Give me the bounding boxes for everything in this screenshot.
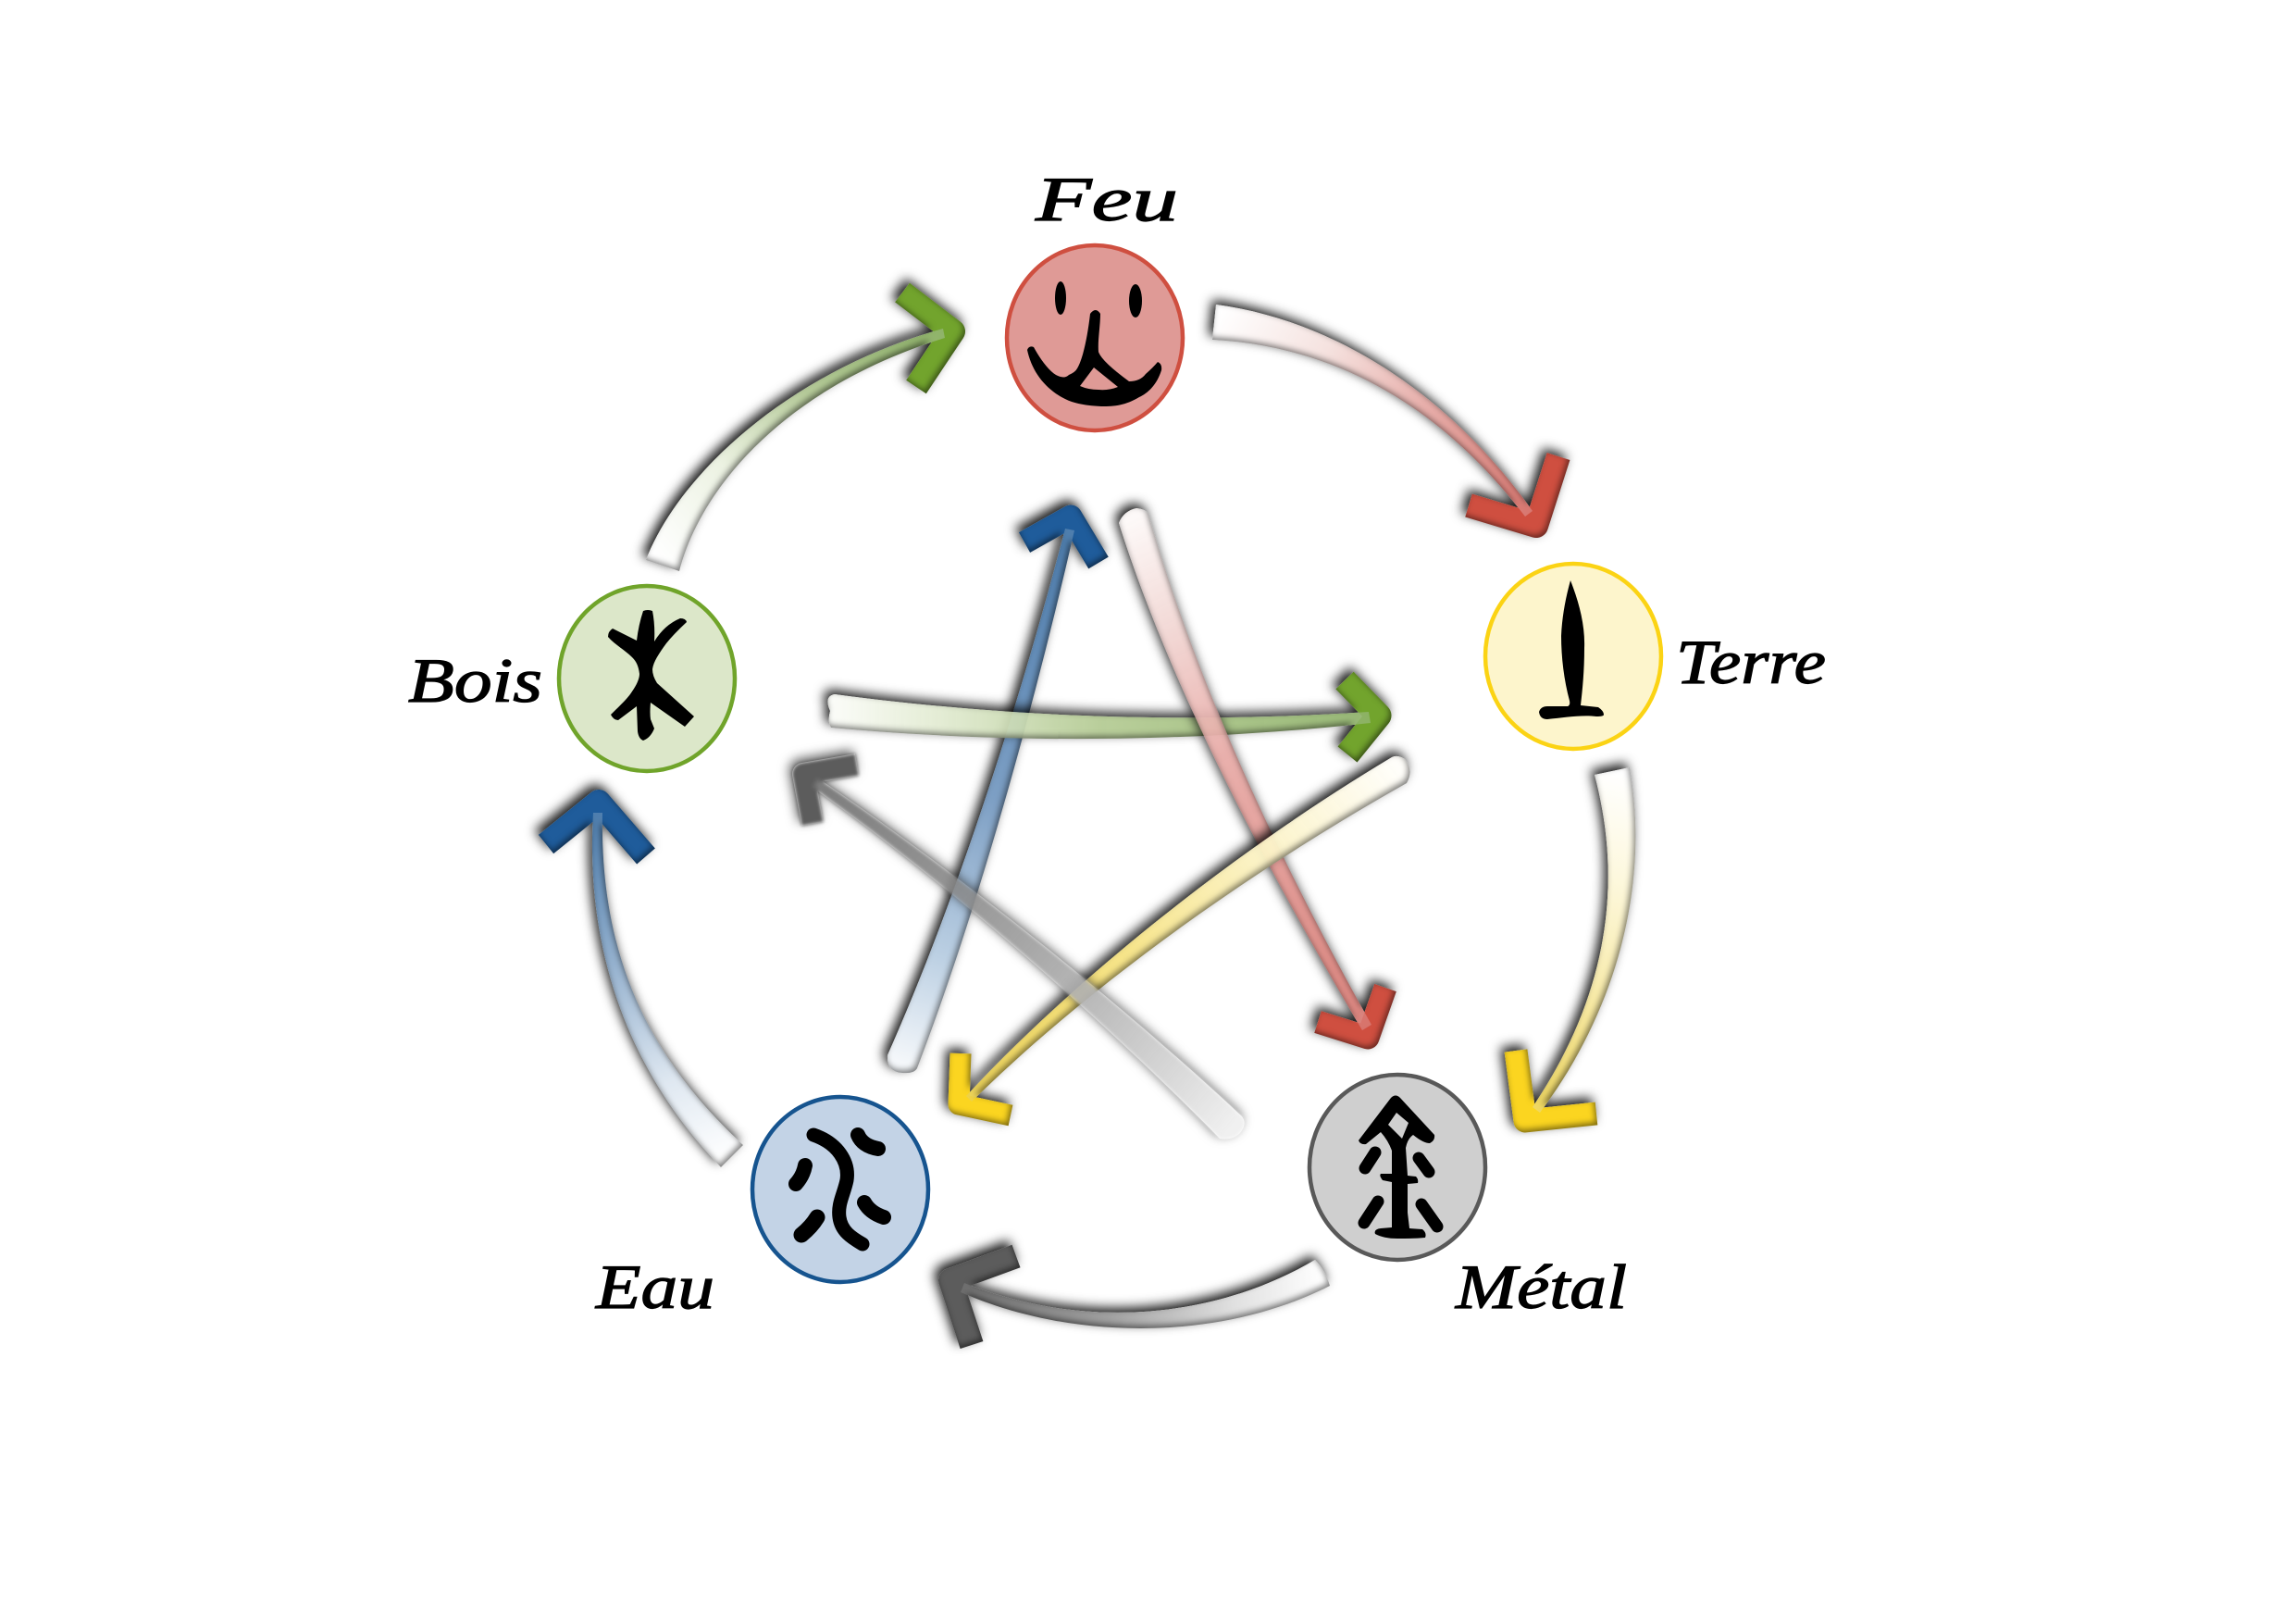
- node: Terre: [1485, 564, 1661, 749]
- arrow: Feu to Terre: [1212, 305, 1558, 526]
- node: Eau: [752, 1097, 928, 1282]
- label: Feu: Feu: [1035, 164, 1178, 234]
- icon: Terre glyph: [1539, 580, 1604, 719]
- arrow: Terre to Métal: [1516, 767, 1635, 1121]
- icon: Eau glyph: [796, 1135, 884, 1244]
- label: Métal: Métal: [1455, 1252, 1627, 1322]
- node: Bois: [559, 586, 735, 771]
- arrow: Terre to Eau: [959, 756, 1410, 1115]
- arrow: Eau to Feu: [887, 517, 1098, 1073]
- node: Feu: [1007, 245, 1183, 430]
- arrow: Eau to Bois: [546, 802, 743, 1167]
- label: Bois: Bois: [408, 645, 542, 716]
- icon: Métal glyph: [1359, 1096, 1437, 1239]
- arrow: Feu to Métal: [1119, 508, 1385, 1038]
- arrow: Métal to Eau: [950, 1256, 1330, 1345]
- icon: Bois glyph: [608, 610, 694, 741]
- icon: Feu glyph: [1027, 281, 1161, 406]
- node: Métal: [1309, 1075, 1485, 1260]
- arrow: Bois to Feu: [646, 293, 953, 571]
- arrow: Métal to Bois: [803, 765, 1245, 1139]
- label: Eau: Eau: [595, 1252, 714, 1322]
- label: Terre: Terre: [1676, 627, 1826, 697]
- arrow: Bois to Terre: [827, 680, 1379, 754]
